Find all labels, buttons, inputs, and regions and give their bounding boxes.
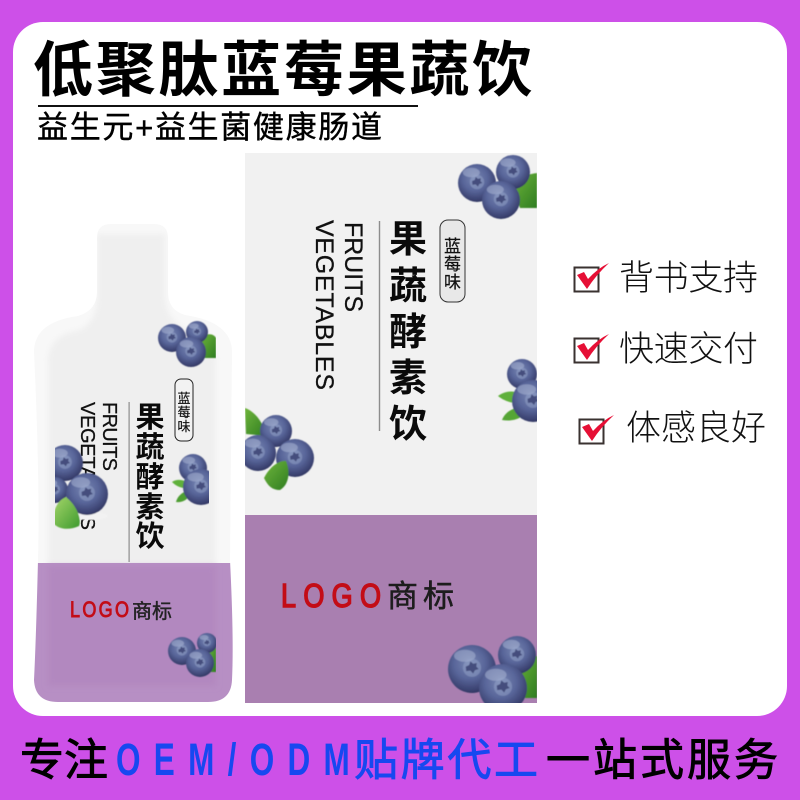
pouch blueberries top	[158, 321, 216, 367]
feature: 背书支持: 背书支持	[619, 259, 758, 298]
pouch vertical English text: VEGETABLES	[76, 402, 98, 530]
pouch product name	[135, 402, 165, 553]
bottom banner slogan: 专注	[20, 736, 108, 785]
pouch blueberries bottom	[168, 633, 217, 677]
box product name: 蔬	[389, 266, 427, 308]
pouch product	[30, 220, 236, 705]
pouch divider	[128, 402, 130, 562]
pouch blueberries left	[55, 444, 109, 530]
pouch vertical English text: FRUITS	[98, 402, 120, 471]
pouch product name: 素	[135, 491, 165, 524]
box blueberries left	[240, 408, 314, 490]
box product name	[389, 219, 427, 446]
box blueberries top right	[458, 155, 537, 219]
box vertical English text: VEGETABLES	[310, 220, 338, 390]
pouch product name: 酵	[135, 461, 165, 494]
checkbox icon	[574, 334, 609, 362]
pouch flavour tag: 味	[177, 419, 191, 434]
title: 低聚肽蓝莓果蔬饮	[33, 37, 532, 104]
pouch product name: 果	[135, 402, 165, 434]
subtitle: 益生元+益生菌健康肠道	[37, 110, 382, 145]
pouch blueberries middle	[172, 453, 209, 506]
bottom banner slogan: OEM/ODM	[116, 736, 350, 785]
box product name: 素	[389, 358, 427, 400]
bottom banner slogan: 一站式服务	[546, 736, 778, 785]
pouch product name: 饮	[135, 520, 165, 553]
box flavour tag	[440, 220, 465, 302]
title underline	[38, 105, 418, 107]
checkbox icon	[574, 263, 609, 292]
pouch flavour tag	[175, 379, 193, 441]
box flavour tag: 味	[444, 273, 461, 292]
box vertical English text	[310, 220, 367, 390]
box product name: 饮	[389, 404, 427, 446]
pouch logo	[70, 598, 172, 623]
box product name: 果	[389, 219, 427, 261]
box body	[245, 153, 537, 703]
box vertical English text: FRUITS	[339, 222, 367, 312]
pouch logo: LOGO	[70, 598, 129, 622]
pouch body	[30, 220, 236, 705]
box logo: 商标	[387, 579, 454, 614]
bottom banner slogan	[20, 736, 778, 785]
box divider	[379, 221, 380, 431]
box blueberries bottom right	[448, 636, 537, 703]
bottom banner slogan: 贴牌代工	[354, 736, 538, 785]
checkbox icon	[580, 415, 614, 444]
feature: 体感良好: 体感良好	[626, 409, 766, 448]
box flavour tag: 蓝	[444, 237, 461, 256]
box product name: 酵	[389, 312, 427, 354]
box flavour tag: 莓	[444, 255, 461, 274]
feature: 快速交付: 快速交付	[619, 330, 758, 369]
pouch flavour tag: 莓	[177, 405, 191, 420]
box blueberries right	[498, 358, 537, 423]
pouch vertical English text	[76, 402, 120, 530]
pouch product name: 蔬	[135, 431, 165, 464]
box logo: LOGO	[281, 579, 381, 615]
box product	[240, 153, 554, 712]
box logo	[281, 579, 454, 615]
pouch flavour tag: 蓝	[177, 391, 191, 406]
pouch logo: 商标	[132, 600, 172, 623]
